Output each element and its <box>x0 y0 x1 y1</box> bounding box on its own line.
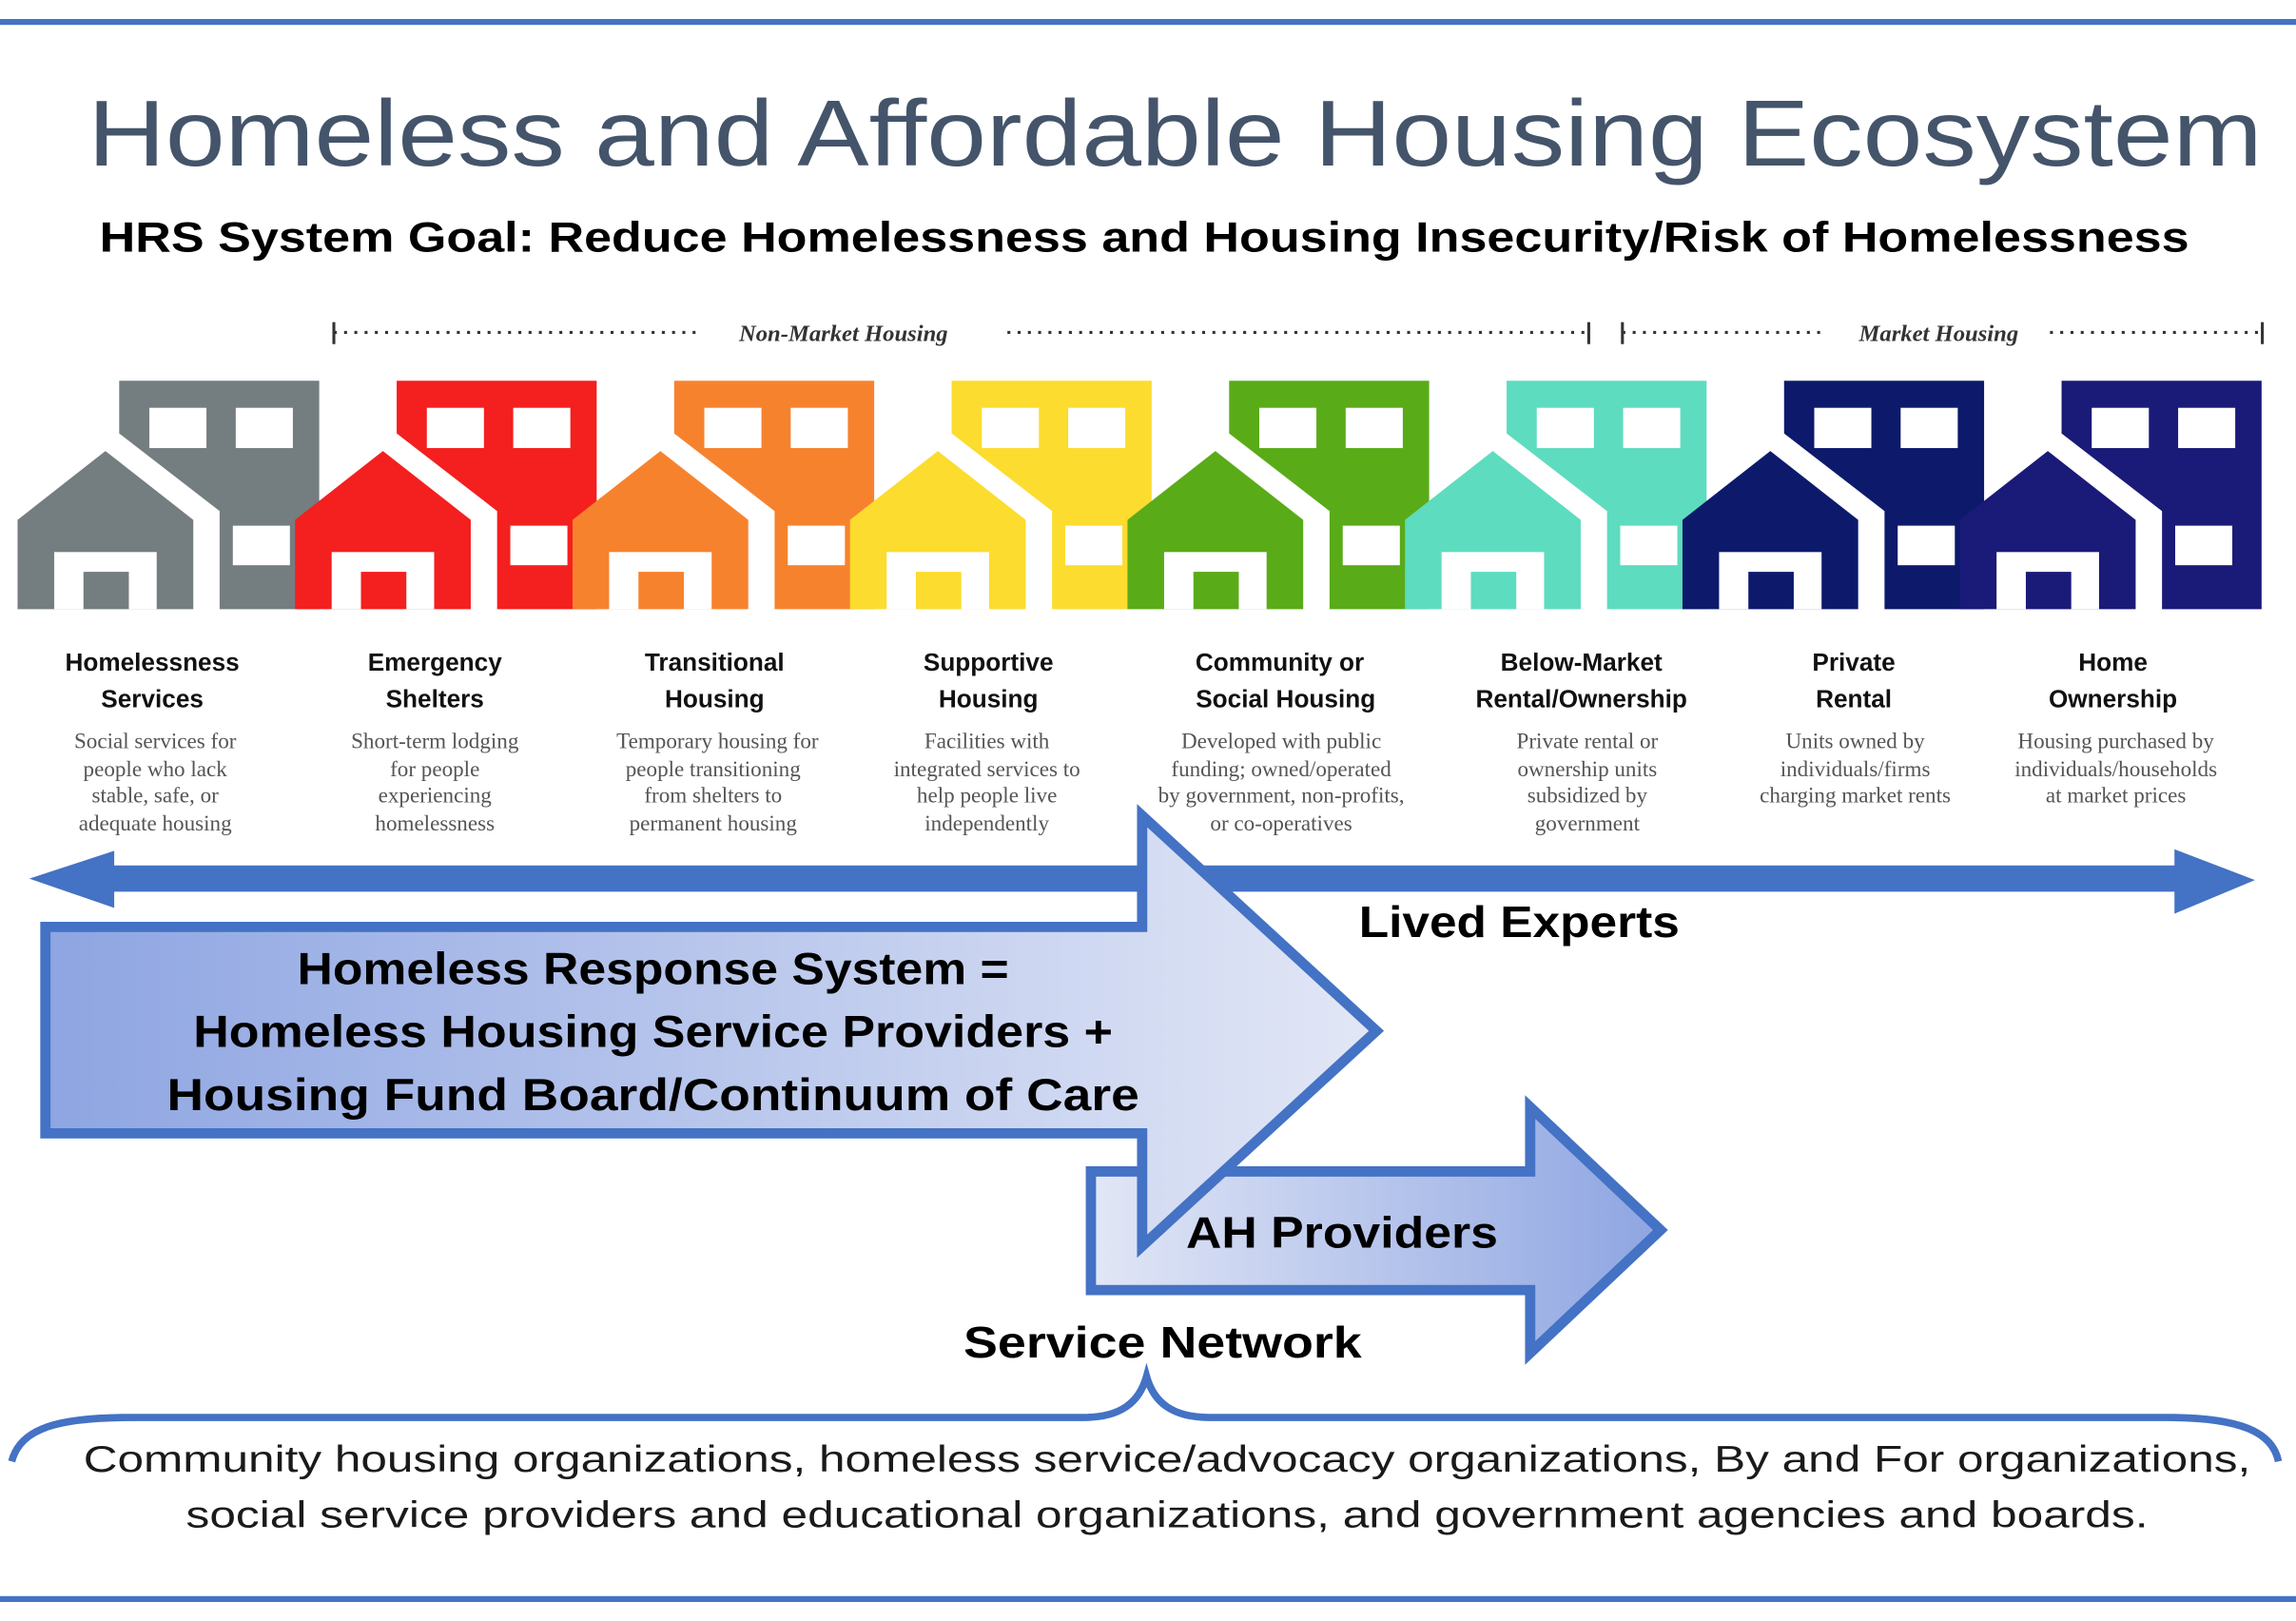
label: supportive housing <box>894 648 1080 835</box>
bracket: market housing: Market Housing <box>1858 322 2018 347</box>
label: supportive housing: help people live <box>917 783 1057 808</box>
label: emergency shelters: Short-term lodging <box>351 729 519 753</box>
label: private rental: Private <box>1812 648 1896 676</box>
icon: teal house <box>1405 381 1706 609</box>
text: HRS definition <box>167 944 1139 1121</box>
label: private rental <box>1760 648 1951 808</box>
label: supportive housing: Facilities with <box>924 729 1050 753</box>
label: homelessness services: Social services for <box>74 729 237 753</box>
label: homelessness services: Homelessness <box>66 648 240 676</box>
label: community or social housing: or co-operatives <box>1210 810 1352 835</box>
text: service network description: Community housing organizations, homeless service/advocacy organizations, By and For organizations, <box>84 1439 2250 1480</box>
label: transitional housing: permanent housing <box>630 810 797 835</box>
label: emergency shelters: homelessness <box>375 810 495 835</box>
label: homelessness services: Services <box>101 684 204 713</box>
icon: navy house <box>1683 381 1984 609</box>
label: community or social housing: Developed with public <box>1181 729 1381 753</box>
label: emergency shelters <box>351 648 519 835</box>
subtitle: HRS System Goal: Reduce Homelessness and Housing Insecurity/Risk of Homelessness <box>100 215 2189 262</box>
bracket: non-market housing: Non-Market Housing <box>738 322 948 347</box>
icon: indigo house <box>1960 381 2262 609</box>
label: emergency shelters: for people <box>390 756 479 781</box>
label: home ownership <box>2014 648 2217 808</box>
label: homelessness services <box>66 648 240 835</box>
label: below-market <box>1476 648 1687 835</box>
label: private rental: Rental <box>1816 684 1892 713</box>
label: homelessness services: stable, safe, or <box>92 783 219 808</box>
label: private rental: charging market rents <box>1760 783 1951 808</box>
label: home ownership: at market prices <box>2046 783 2186 808</box>
label: below-market: Below-Market <box>1501 648 1663 676</box>
text: service network description: social service providers and educational organizations, and government agencies and boards. <box>186 1494 2149 1535</box>
label: private rental: Units owned by <box>1786 729 1925 753</box>
label: transitional housing: Housing <box>665 684 765 713</box>
text: HRS definition: Housing Fund Board/Continuum of Care <box>167 1070 1139 1121</box>
label: emergency shelters: Emergency <box>368 648 502 676</box>
category labels <box>66 648 2217 835</box>
label: community or social housing: by government, non-profits, <box>1158 783 1405 808</box>
label: emergency shelters: experiencing <box>379 783 492 808</box>
text: service network description <box>84 1439 2250 1535</box>
label: lived experts: Lived Experts <box>1359 897 1680 947</box>
label: supportive housing: independently <box>924 810 1049 835</box>
brace <box>11 1377 2279 1461</box>
label: home ownership: Home <box>2078 648 2148 676</box>
label: home ownership: Housing purchased by <box>2017 729 2214 753</box>
title: Homeless and Affordable Housing Ecosystem <box>88 81 2263 186</box>
label: transitional housing: people transitioning <box>626 756 801 781</box>
label: below-market: Rental/Ownership <box>1476 684 1687 713</box>
label: emergency shelters: Shelters <box>386 684 484 713</box>
label: transitional housing: from shelters to <box>644 783 782 808</box>
label: supportive housing: Housing <box>939 684 1039 713</box>
label: transitional housing: Temporary housing for <box>616 729 819 753</box>
label: service network: Service Network <box>963 1318 1362 1367</box>
label: supportive housing: integrated services to <box>894 756 1080 781</box>
label: homelessness services: people who lack <box>84 756 227 781</box>
arrow: AH providers <box>1091 1107 1661 1353</box>
icon: orange house <box>573 381 874 609</box>
label: supportive housing: Supportive <box>924 648 1054 676</box>
label: home ownership: Ownership <box>2049 684 2177 713</box>
label: community or social housing: Social Housing <box>1196 684 1375 713</box>
houses row <box>17 381 2262 609</box>
arrow: homeless response system <box>46 815 1376 1246</box>
label: transitional housing <box>616 648 819 835</box>
label: community or social housing <box>1158 648 1405 835</box>
label: below-market: ownership units <box>1517 756 1657 781</box>
icon: gray house <box>17 381 320 609</box>
label: home ownership: individuals/households <box>2014 756 2217 781</box>
text: HRS definition: Homeless Response System = <box>298 944 1009 994</box>
label: below-market: Private rental or <box>1517 729 1659 753</box>
label: community or social housing: Community or <box>1196 648 1364 676</box>
label: below-market: government <box>1535 810 1641 835</box>
label: below-market: subsidized by <box>1527 783 1647 808</box>
label: transitional housing: Transitional <box>645 648 785 676</box>
icon: red house <box>295 381 596 609</box>
label: community or social housing: funding; owned/operated <box>1171 756 1391 781</box>
label: homelessness services: adequate housing <box>79 810 232 835</box>
text: HRS definition: Homeless Housing Service Providers + <box>193 1007 1113 1058</box>
arrow: double-headed continuum <box>29 850 2255 914</box>
icon: green house <box>1127 381 1430 609</box>
label: private rental: individuals/firms <box>1780 756 1930 781</box>
label: AH providers: AH Providers <box>1186 1207 1498 1257</box>
icon: yellow house <box>850 381 1152 609</box>
